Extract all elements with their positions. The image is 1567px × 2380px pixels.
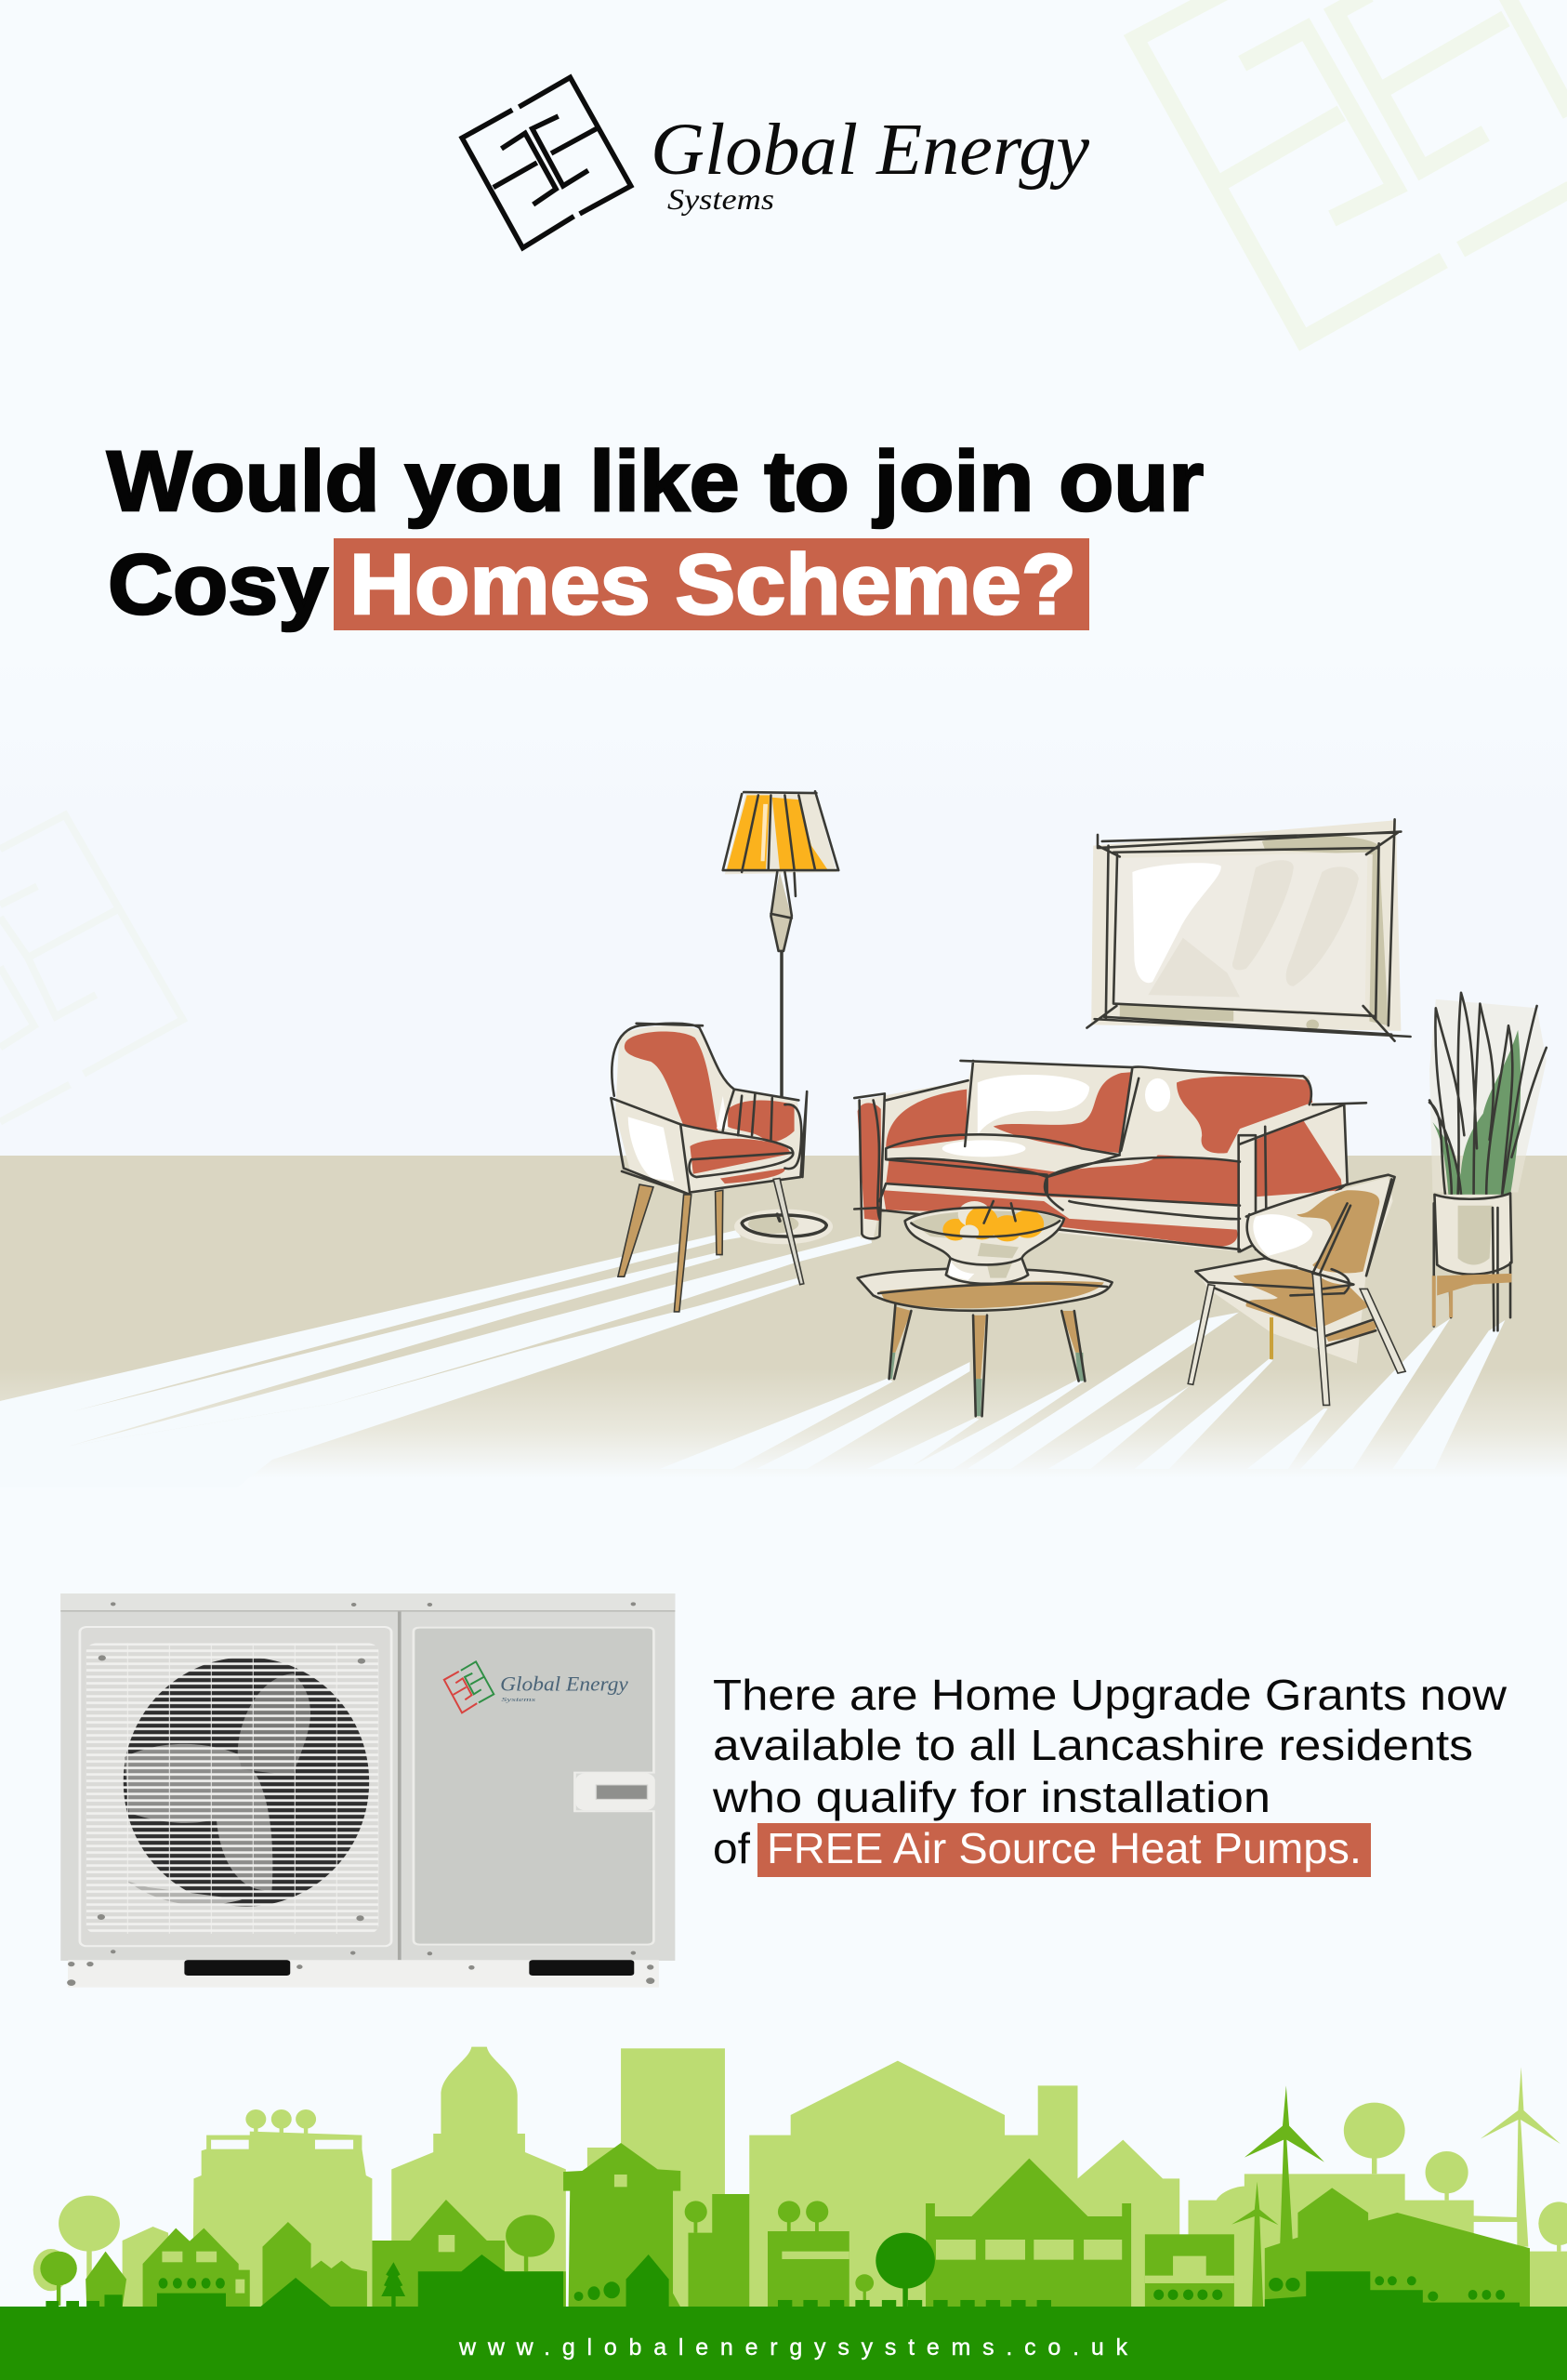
dark houses left (46, 2254, 669, 2307)
logo subtitle: Systems (667, 182, 774, 216)
armchair (611, 1024, 807, 1312)
display window (596, 1785, 648, 1799)
side chair (1188, 1175, 1405, 1405)
floor with light beams (0, 1156, 1567, 1488)
mid buildings right (768, 2085, 1530, 2307)
highlight box: free pumps (757, 1823, 1371, 1877)
watermark: top right logo (1136, 0, 1567, 339)
website url: www.globalenergysystems.co.uk (458, 2334, 1128, 2360)
illustration: living room (611, 791, 1547, 1416)
pump casing (60, 1593, 675, 1961)
light buildings left (33, 2047, 755, 2307)
skyline left (33, 2047, 849, 2307)
fan grille (86, 1643, 378, 1934)
title line 1: Would you like to join our (107, 434, 1204, 529)
logo wordmark: Global Energy (651, 110, 1090, 191)
plant in pot (1429, 993, 1547, 1330)
highlighted title words: Homes Scheme? (349, 537, 1076, 632)
body line 3: who qualify for installation (712, 1773, 1271, 1821)
body line 1: There are Home Upgrade Grants now (713, 1671, 1508, 1719)
coffee table (858, 1268, 1113, 1416)
wall mirror (1086, 819, 1411, 1041)
logo: Global Energy Systems (462, 77, 1090, 248)
title line 2 start: Cosy (108, 537, 328, 632)
unit logo mark (444, 1661, 494, 1712)
mid buildings left (40, 2143, 849, 2307)
fan and blades (124, 1658, 369, 1907)
icon: logo mark (462, 77, 631, 248)
mid windows left (162, 2175, 849, 2294)
light beams: left (0, 1230, 872, 1488)
door panel (414, 1628, 653, 1945)
floor (0, 1156, 1567, 1478)
handle recess (575, 1773, 655, 1810)
sofa (854, 1061, 1366, 1251)
watermark: left logo (0, 815, 183, 1122)
base slots (184, 1960, 634, 1976)
light windows left (211, 2140, 353, 2149)
screws (67, 1602, 654, 1986)
mid windows right (782, 2240, 1234, 2283)
highlight box: Homes Scheme (334, 538, 1089, 630)
floor lamp (723, 791, 838, 1244)
highlighted body words: FREE Air Source Heat Pumps. (767, 1824, 1362, 1872)
skyline right (749, 2061, 1567, 2307)
skyline illustration (0, 2047, 1567, 2380)
unit logo wordmark: Global Energy (500, 1673, 629, 1695)
text block: grants (712, 1671, 1508, 1877)
light buildings right (749, 2061, 1567, 2307)
fan panel (80, 1627, 391, 1946)
air source heat pump unit (60, 1593, 675, 1988)
wall gap right (1474, 2222, 1517, 2247)
fruit bowl (905, 1201, 1064, 1284)
ground strip (0, 2307, 1567, 2380)
title: headline (107, 434, 1204, 632)
dark trees and blocks right (778, 2233, 1520, 2307)
light beams: right (660, 1313, 1505, 1469)
pump base (68, 1960, 659, 1988)
unit logo subtitle: Systems (502, 1696, 535, 1703)
body line 4 start: of (713, 1824, 750, 1872)
body line 2: available to all Lancashire residents (713, 1721, 1473, 1769)
